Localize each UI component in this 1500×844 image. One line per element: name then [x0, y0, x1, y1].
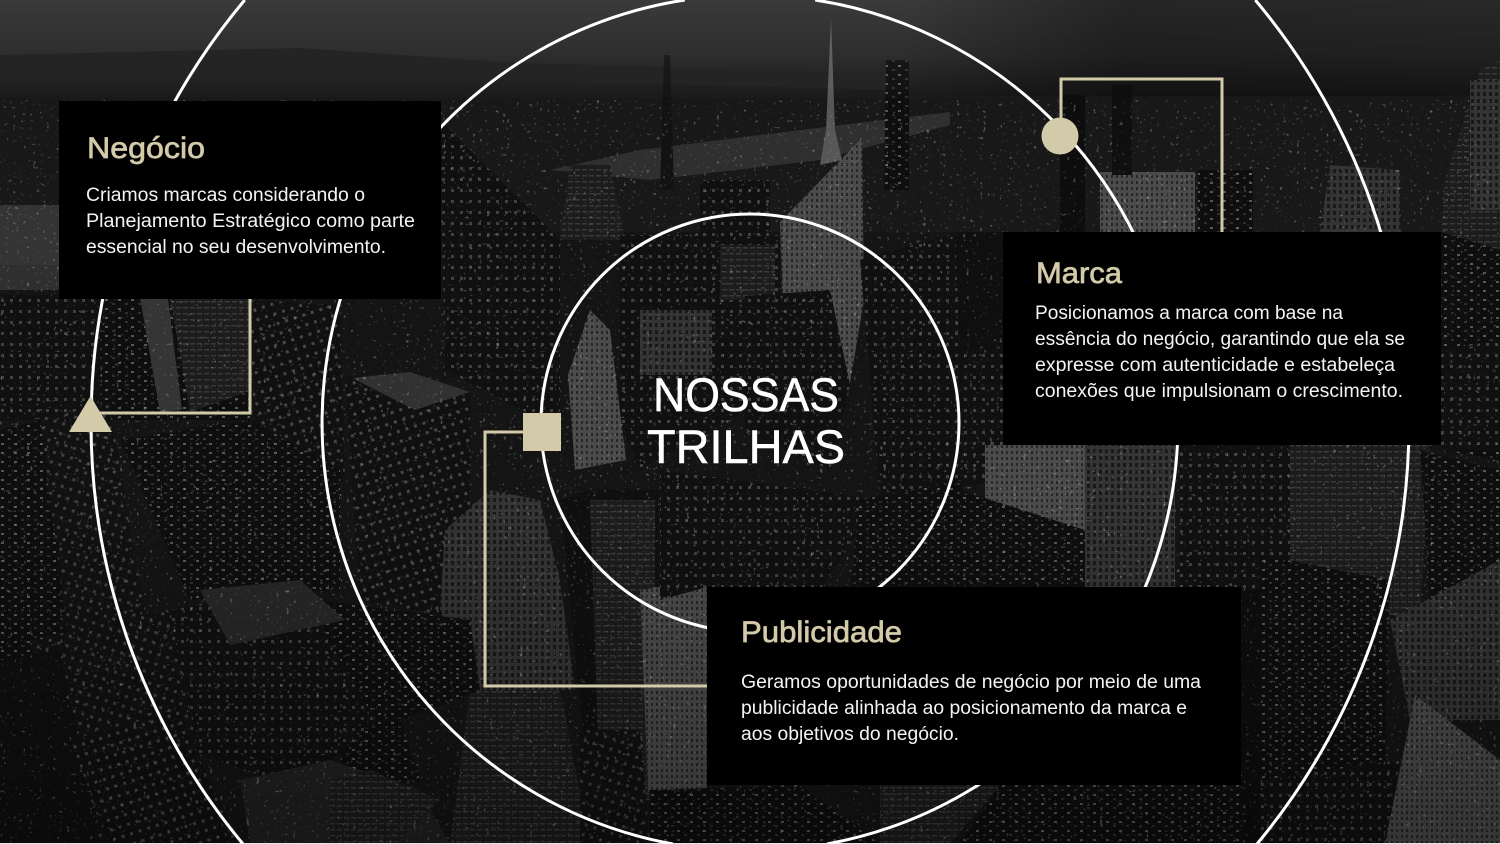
central title: TRILHAS: [647, 420, 845, 473]
text block: Publicidade description: [741, 672, 1201, 745]
connector: Publicidade to square: [485, 432, 712, 686]
panel: Negócio: [59, 101, 441, 299]
text block: Publicidade description: publicidade alinhada ao posicionamento da marca e: [741, 698, 1187, 719]
text block: Marca description: conexões que impulsionam o crescimento.: [1035, 381, 1403, 402]
connector: Marca to circle: [1061, 79, 1222, 236]
text block: Marca description: essência do negócio, garantindo que ela se: [1035, 329, 1405, 350]
central title: [647, 368, 845, 473]
panel: Publicidade: [707, 587, 1241, 785]
text block: Negócio description: Planejamento Estratégico como parte: [86, 211, 415, 232]
text block: Marca description: [1035, 303, 1405, 402]
text block: Publicidade description: aos objetivos do negócio.: [741, 724, 959, 745]
text block: Publicidade description: Geramos oportunidades de negócio por meio de uma: [741, 672, 1201, 693]
heading: Marca: Marca: [1036, 257, 1122, 290]
text block: Negócio description: Criamos marcas considerando o: [86, 185, 365, 206]
connector: Negócio to triangle: [90, 295, 250, 413]
text block: Marca description: expresse com autenticidade e estabeleça: [1035, 355, 1395, 376]
heading: Negócio: Negócio: [87, 132, 205, 165]
text block: Marca description: Posicionamos a marca com base na: [1035, 303, 1343, 324]
heading: Publicidade: Publicidade: [741, 616, 902, 649]
text block: Negócio description: essencial no seu desenvolvimento.: [86, 237, 386, 258]
panel: Marca: [1003, 232, 1441, 445]
text block: Negócio description: [86, 185, 415, 258]
central title: NOSSAS: [653, 368, 839, 421]
icon: circle marker: [1042, 118, 1078, 154]
icon: square marker: [523, 413, 561, 451]
icon: triangle marker: [69, 396, 112, 432]
